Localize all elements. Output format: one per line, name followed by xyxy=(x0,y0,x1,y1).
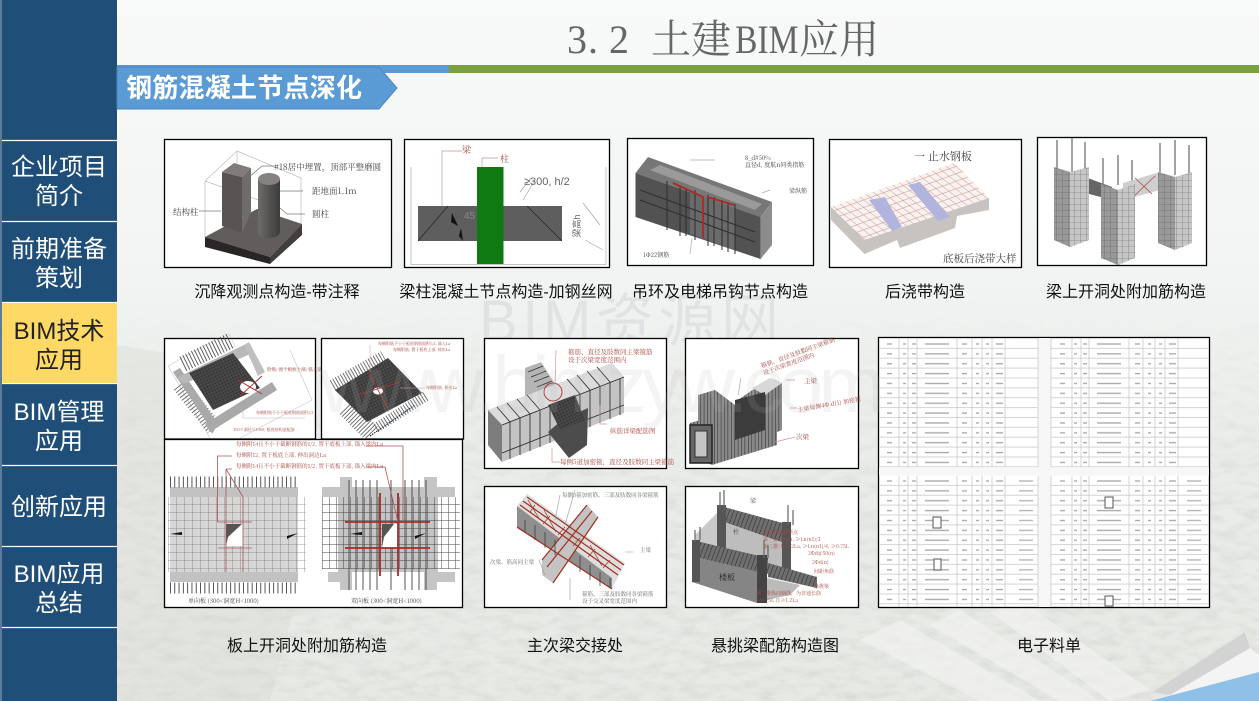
panel: main-secondary beam 3 xyxy=(484,486,666,608)
panel: cantilever beam: 2Φd(n) xyxy=(812,559,829,566)
schedule stirrup icons xyxy=(933,497,1113,606)
panel: settlement point: 距地面1.1m xyxy=(312,185,357,197)
nav: BIM管理应用: BIM管理 xyxy=(14,399,104,426)
panel: beam-column joint: 梁高h xyxy=(571,214,582,238)
schedule rows xyxy=(879,339,1209,467)
schedule columns xyxy=(899,338,1178,607)
annotations: 箍筋、直径及肢数同主梁箍筋 xyxy=(760,335,836,370)
annotations: 附筋, 置于板底上部, 锚入梁内La xyxy=(267,366,332,373)
panel: main-secondary beam 2: 主梁 xyxy=(804,376,818,385)
panel: beam-column joint: 45 xyxy=(464,211,476,222)
panel: slab opening plans xyxy=(164,440,462,608)
caption: 主次梁交接处 xyxy=(527,637,623,655)
nav: 前期准备策划: 策划 xyxy=(35,265,83,292)
panel: main-secondary beam 2: 主梁每侧4Φ d(1) 加密箍 xyxy=(797,394,861,414)
panel: slab opening plans: 双向板 (300<洞宽H<1000) xyxy=(351,596,422,605)
caption: 梁柱混凝土节点构造-加钢丝网 xyxy=(399,283,613,301)
caption: 梁上开洞处附加筋构造 xyxy=(1046,283,1206,301)
header rule xyxy=(117,65,1259,73)
one-way plan xyxy=(168,456,306,588)
rods xyxy=(183,340,232,364)
title xyxy=(567,17,879,62)
panel: post-cast strip xyxy=(830,140,1022,268)
panel: slab opening one-way 3D: 每侧附筋不小于板底钢筋面积1/2 xyxy=(256,409,314,416)
nav: BIM应用总结: BIM应用 xyxy=(14,561,104,588)
caption: 电子料单 xyxy=(1017,637,1081,655)
annotations: 梁 xyxy=(462,143,472,156)
panel: post-cast strip: 底板后浇带大样 xyxy=(943,251,1017,266)
rods xyxy=(333,357,384,386)
square column xyxy=(222,172,242,233)
cross beam xyxy=(542,505,598,583)
background: faded aerial photo xyxy=(117,309,1259,701)
panel: beam-column joint: ≥300, h/2 xyxy=(524,176,570,188)
nav: 企业项目简介 xyxy=(11,154,107,210)
hole xyxy=(240,381,256,393)
panel: cantilever beam: 3Φd@50(n) xyxy=(808,550,835,557)
section ribbon xyxy=(117,67,397,109)
annotations: 梁 xyxy=(750,496,757,505)
panel: main-secondary beam 3: 箍筋、三部及肢数同各梁箍筋 xyxy=(582,590,654,598)
panel: cantilever beam: 柱 xyxy=(733,527,739,536)
panel: cantilever beam: 非通长筋截断点 xyxy=(763,529,799,536)
round column xyxy=(258,180,280,238)
title: BIM xyxy=(735,17,798,62)
main beam xyxy=(517,494,625,589)
secondary beam back xyxy=(525,362,562,412)
nav: BIM技术应用: BIM技术 xyxy=(14,318,104,345)
floor slab label: 楼板 xyxy=(719,572,735,583)
panel: cantilever beam: 第二排: h+1.2La, ≥Ln(n1)/4, ≥0.75L xyxy=(763,543,849,550)
panel: main-secondary beam 2 xyxy=(686,335,861,468)
panel: cantilever beam: 间距角筋 xyxy=(814,568,834,575)
panel: beam-column joint xyxy=(404,140,610,268)
caption: 悬挑梁配筋构造图 xyxy=(711,637,839,655)
panel: settlement point xyxy=(164,140,392,268)
title: 土建 xyxy=(651,17,731,62)
sidebar xyxy=(0,0,117,701)
main beam xyxy=(735,378,782,450)
annotations: 每侧附14且不小于截断钢筋的1/2, 置于底板上部, 锚入梁内La xyxy=(236,440,383,448)
main beam xyxy=(488,363,624,462)
corner accent xyxy=(1150,672,1259,701)
nav active: BIM技术应用 xyxy=(2,303,117,383)
red hook xyxy=(673,183,734,238)
nav: BIM应用总结: 总结 xyxy=(35,590,83,617)
annotations: #18居中埋置，顶部平整磨圆 xyxy=(274,161,381,173)
panel: main-secondary beam 1: 每侧5道加密箍，直径及肢数同主梁箍筋 xyxy=(560,457,675,466)
two-way plan xyxy=(322,446,460,590)
panel: slab opening plans: 每侧附14且不小于截断钢筋的1/2, 置于底板下部, 锚入梁内La xyxy=(236,462,383,470)
panel: main-secondary beam 3: 设于交叉梁宽度范围内 xyxy=(582,597,638,605)
panel: slab opening two-way 3D: 每侧附筋, 置于板底上部, 伸出La xyxy=(393,346,451,353)
panel: slab opening plans: 每侧附12, 置于板底上部, 伸出洞边La xyxy=(236,451,326,459)
ribbon heading: 钢筋混凝土节点深化 xyxy=(126,73,362,103)
columns xyxy=(1054,167,1089,247)
watermark: url: www.bimzyw.com xyxy=(319,340,885,429)
panel: lifting ring: 梁纵筋 xyxy=(789,186,807,195)
nav: 前期准备策划: 前期准备 xyxy=(11,236,107,263)
panel: main-secondary beam 2: 设于次梁宽度范围内 xyxy=(762,350,815,377)
nav: BIM管理应用 xyxy=(14,399,104,455)
panel: slab opening two-way 3D xyxy=(322,338,464,439)
panel: slab opening two-way 3D: 每侧附筋, 伸出La xyxy=(426,384,458,391)
corner wedge xyxy=(1153,632,1250,695)
panel: settlement point: 结构柱 xyxy=(173,206,199,218)
panel: lifting ring xyxy=(628,138,814,266)
gray beam xyxy=(418,206,562,241)
panel: electronic bar schedule xyxy=(878,338,1210,608)
nav: BIM技术应用: 应用 xyxy=(35,347,83,374)
beams xyxy=(1074,173,1112,200)
title: 应用 xyxy=(799,17,879,62)
nav: 企业项目简介: 简介 xyxy=(35,183,83,210)
panel: main-secondary beam 2: 次梁 xyxy=(796,432,810,441)
caption: 吊环及电梯吊钩节点构造 xyxy=(632,283,808,301)
annotations: 箍筋、直径及肢数同主梁箍筋 xyxy=(568,347,653,356)
panel: main-secondary beam 3: 次梁、筋高同主梁 xyxy=(490,558,535,566)
panel: cantilever beam xyxy=(686,486,858,608)
nav: BIM应用总结 xyxy=(14,561,104,617)
panel: cantilever beam: 第二排纵向钢筋，为非通长筋 xyxy=(756,590,821,597)
rods xyxy=(170,482,298,588)
nav: BIM管理应用: 应用 xyxy=(35,428,83,455)
front beam xyxy=(690,398,777,465)
caption: 板上开洞处附加筋构造 xyxy=(227,637,387,655)
panel: slab opening one-way 3D xyxy=(164,338,332,439)
red bars xyxy=(345,493,430,576)
panel: cantilever beam: 第一排: ≥Ln, ≥Ln(n1)/3 xyxy=(763,536,821,543)
secondary beam front xyxy=(548,408,588,458)
annotations: 一 止水钢板 xyxy=(914,148,972,164)
panel: cantilever beam: 悬挑梁 xyxy=(814,583,830,590)
title: 3.2 xyxy=(567,17,629,62)
panel: main-secondary beam 3: 主梁 xyxy=(640,546,652,554)
panel: cantilever beam: ≥0.75L 且≥1.2La xyxy=(756,597,798,604)
panel: beam-column joint: 柱 xyxy=(500,152,509,165)
blue strips xyxy=(869,197,902,231)
panel: main-secondary beam 1: 设于次梁宽度范围内 xyxy=(568,355,627,364)
caption: 沉降观测点构造-带注释 xyxy=(194,283,360,301)
panel: beam opening xyxy=(1038,138,1206,266)
concrete beams xyxy=(173,368,218,434)
annotations: 8_d#50% xyxy=(745,153,771,162)
panel: settlement point: 圆柱 xyxy=(312,208,330,220)
nav: 创新应用: 创新应用 xyxy=(11,494,107,521)
panel: slab opening one-way 3D: 300≤洞径≤1000, 板底按构造配筋 xyxy=(233,426,295,433)
watermark: BIM资源网: BIM资源网 xyxy=(479,289,779,354)
panel: main-secondary beam 1: 纵筋详梁配筋图 xyxy=(610,426,656,435)
base block xyxy=(205,209,302,257)
annotations: 每侧附筋不小于板底钢筋面积1/2, 锚入La xyxy=(378,340,451,347)
panel: lifting ring: 直径d, 度航n同类指筋 xyxy=(745,160,804,169)
nav: 企业项目简介: 企业项目 xyxy=(11,154,107,181)
green column xyxy=(477,167,504,264)
nav: BIM技术应用 xyxy=(14,318,104,374)
nav: 前期准备策划 xyxy=(11,236,107,292)
annotations: 毎側3箍加密筋、三部及肢数同各梁箍筋 xyxy=(562,491,659,499)
mesh xyxy=(189,353,260,410)
panel: slab opening plans: 单向板 (300<洞宽H<1000) xyxy=(188,596,259,605)
back secondary beam xyxy=(698,390,735,450)
caption: 后浇带构造 xyxy=(885,283,965,301)
panel: lifting ring: 1Φ22钢筋 xyxy=(643,250,669,259)
panel: main-secondary beam 1 xyxy=(484,338,675,468)
